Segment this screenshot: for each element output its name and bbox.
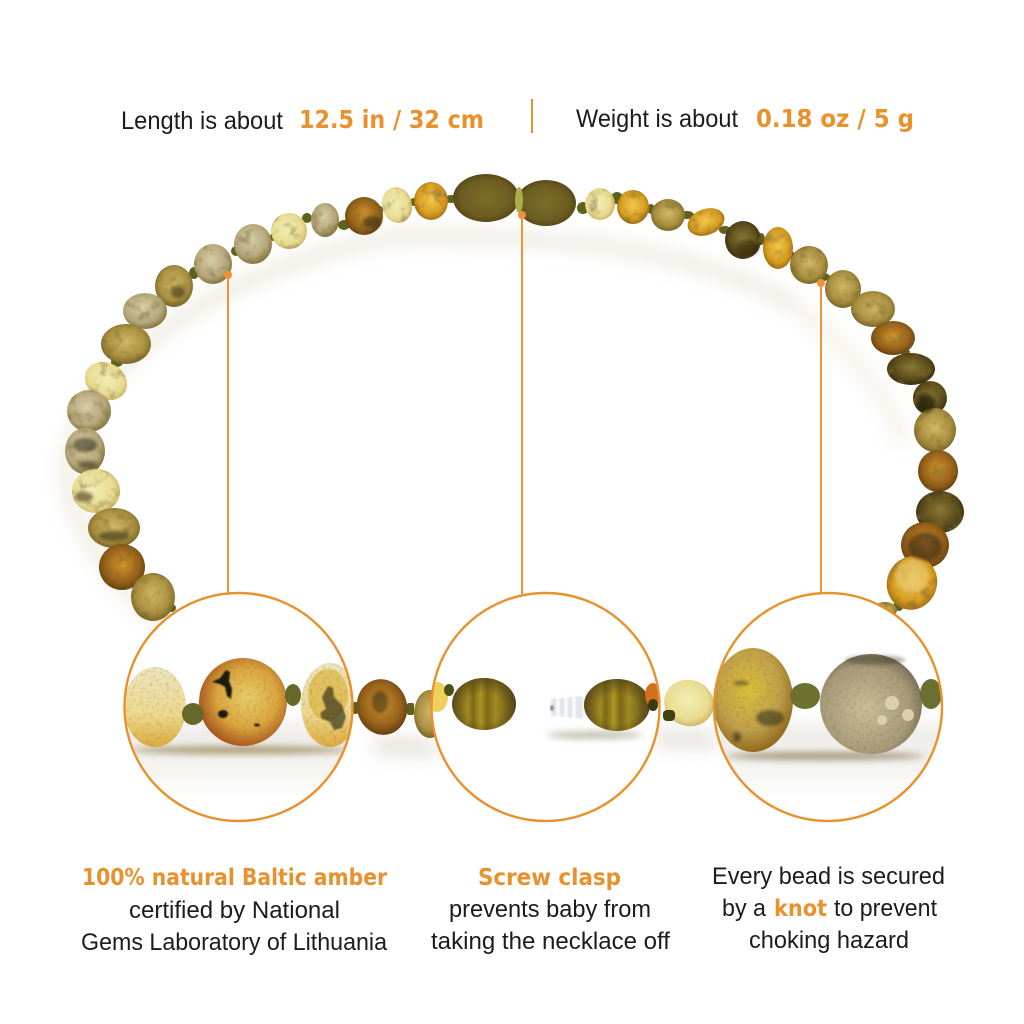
panel: amber close-up circle	[124, 593, 359, 821]
knot	[444, 684, 454, 696]
clasp left half	[452, 678, 516, 730]
knots	[182, 684, 301, 725]
caption: screw clasp: Screw clasp	[478, 865, 621, 891]
inclusions	[733, 655, 905, 742]
caption: knots: Every bead is secured	[712, 863, 945, 890]
leader lines	[224, 211, 825, 594]
close-up beads	[124, 658, 359, 747]
length measurement: 12.5 in / 32 cm	[299, 105, 484, 134]
leader line: knot	[817, 279, 825, 594]
caption: knots: choking hazard	[749, 927, 909, 954]
weight measurement: 0.18 oz / 5 g	[756, 104, 914, 133]
necklace: lower beads between the circles	[351, 673, 720, 741]
bead shadow	[725, 752, 925, 760]
leader line: amber	[224, 271, 232, 594]
inclusions	[212, 670, 346, 730]
knots	[790, 679, 942, 709]
circle outline	[714, 593, 942, 821]
small bead	[432, 682, 448, 712]
necklace: string knots	[78, 192, 937, 612]
bubbles	[877, 696, 914, 725]
necklace: clasp beads	[453, 174, 576, 226]
caption: natural amber: Gems Laboratory of Lithuania	[81, 929, 388, 956]
panel: screw clasp close-up circle	[426, 593, 661, 821]
panel: knot close-up circle	[713, 593, 942, 821]
caption: screw clasp	[431, 865, 670, 955]
caption: knots: knot	[774, 896, 827, 922]
circle outline	[124, 593, 352, 821]
weight measurement: Weight is about	[576, 105, 738, 133]
clasp right half	[584, 679, 650, 731]
clasp shadow	[547, 731, 643, 739]
necklace shadow	[68, 236, 902, 748]
bead inclusions: right	[737, 240, 942, 593]
caption: knots: by a	[722, 895, 767, 922]
orange bead and knot	[645, 683, 658, 711]
caption: natural amber	[81, 865, 388, 956]
weight measurement	[576, 104, 914, 133]
caption: screw clasp: taking the necklace off	[431, 928, 670, 955]
bead shadow	[130, 746, 350, 754]
bead inclusions: left	[73, 216, 381, 541]
close-up beads	[713, 648, 922, 754]
caption: screw clasp: prevents baby from	[449, 896, 651, 923]
length measurement: Length is about	[121, 107, 283, 135]
leader line: clasp	[518, 211, 526, 594]
length measurement	[121, 105, 484, 135]
circle outline	[432, 593, 660, 821]
caption: natural amber: 100% natural Baltic amber	[82, 865, 388, 891]
necklace: left beads	[65, 182, 448, 621]
caption: natural amber: certified by National	[129, 897, 340, 924]
screw thread	[550, 696, 583, 719]
caption: knots	[712, 863, 945, 954]
necklace: right beads	[585, 188, 964, 618]
caption: knots: to prevent	[834, 895, 937, 922]
